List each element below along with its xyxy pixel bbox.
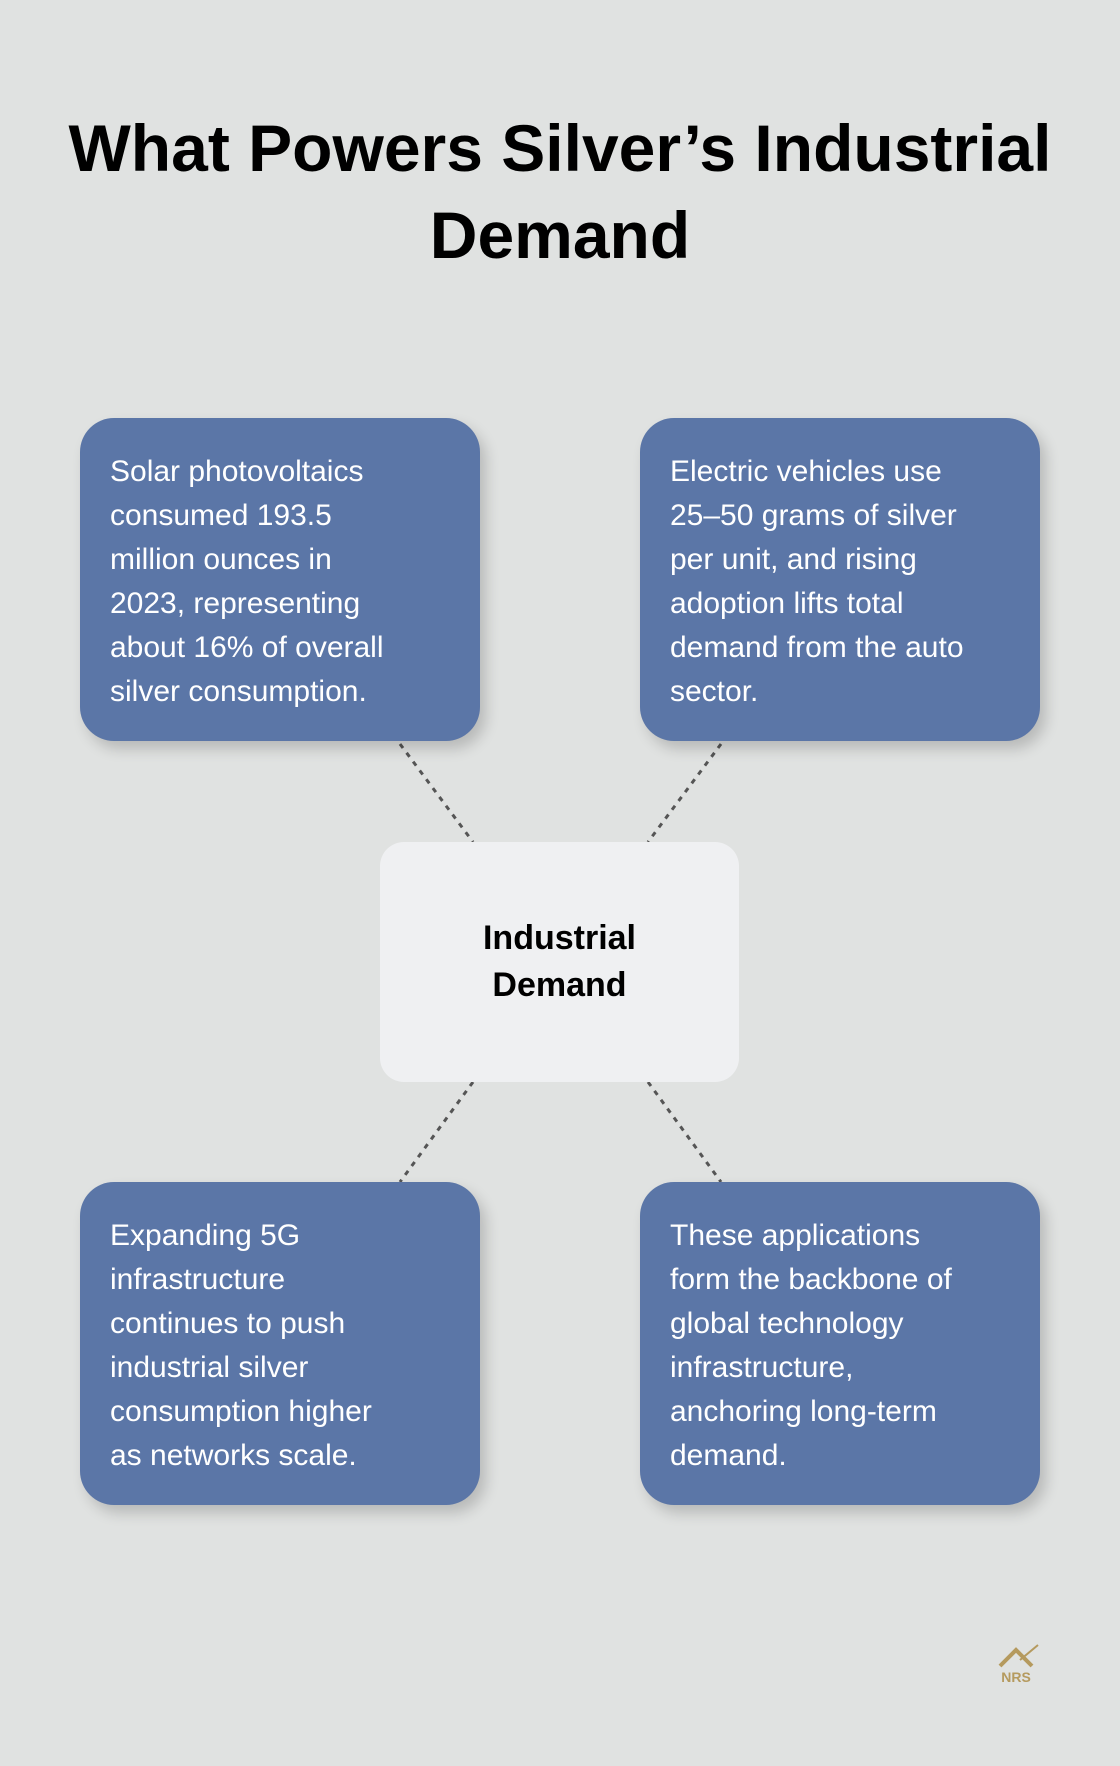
panel: solar: consumed 193.5	[110, 499, 332, 532]
center node: Demand	[492, 966, 627, 1004]
panel: solar: silver consumption.	[110, 675, 367, 708]
panel: solar: about 16% of overall	[110, 631, 384, 664]
panel: 5G: Expanding 5G	[110, 1219, 300, 1252]
panel: backbone	[640, 1182, 1040, 1505]
title	[68, 111, 1051, 272]
panel: 5G: consumption higher	[110, 1395, 372, 1428]
panel: electric vehicles: per unit, and rising	[670, 543, 917, 576]
logo: NRS	[1001, 1669, 1031, 1685]
logo	[998, 1644, 1039, 1685]
panel: 5G: continues to push	[110, 1307, 345, 1340]
panel: backbone: global technology	[670, 1307, 904, 1340]
panel: electric vehicles: 25–50 grams of silver	[670, 499, 957, 532]
center node: Industrial	[483, 919, 636, 957]
center node	[380, 842, 739, 1082]
panel: electric vehicles: sector.	[670, 675, 758, 708]
panel: electric vehicles: adoption lifts total	[670, 587, 903, 620]
panel: backbone: These applications	[670, 1219, 920, 1252]
panel: solar: 2023, representing	[110, 587, 360, 620]
panel: electric vehicles	[640, 418, 1040, 741]
panel: backbone: demand.	[670, 1439, 787, 1472]
title: What Powers Silver’s Industrial	[69, 111, 1051, 185]
title: Demand	[430, 198, 690, 272]
panel: solar	[80, 418, 480, 741]
panel: backbone: form the backbone of	[670, 1263, 952, 1296]
panel: backbone: anchoring long-term	[670, 1395, 937, 1428]
panel: electric vehicles: Electric vehicles use	[670, 455, 942, 488]
panel: backbone: infrastructure,	[670, 1351, 853, 1384]
panel: electric vehicles: demand from the auto	[670, 631, 964, 664]
panel: solar: million ounces in	[110, 543, 332, 576]
panel: 5G	[80, 1182, 480, 1505]
panel: solar: Solar photovoltaics	[110, 455, 363, 488]
panel: 5G: infrastructure	[110, 1263, 285, 1296]
panel: 5G: as networks scale.	[110, 1439, 357, 1472]
panel: 5G: industrial silver	[110, 1351, 308, 1384]
